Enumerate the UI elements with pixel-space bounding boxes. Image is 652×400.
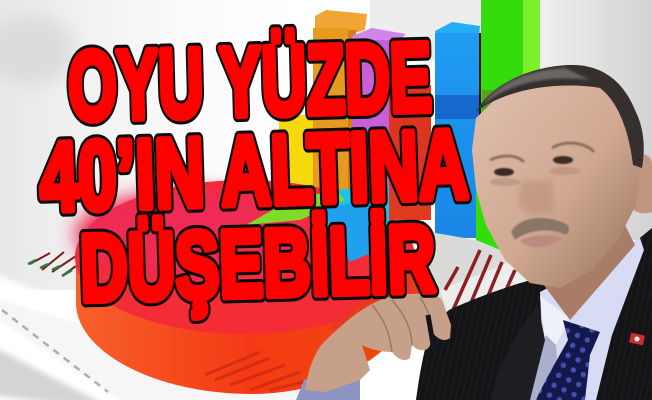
headline [38,23,470,322]
bar: orange [313,10,367,203]
shirt collar [530,238,644,400]
pie side [76,250,420,394]
pie side shading [205,352,320,390]
bar: blue [435,22,482,238]
sleeve [296,372,360,400]
floor wedge with red stripes [400,232,540,320]
face [472,75,642,288]
bar chart columns [279,0,540,250]
bar: red [389,85,431,215]
hand [305,294,451,392]
necktie [536,320,600,400]
flag pin [629,333,645,345]
neck [540,225,635,320]
bar: green [476,0,540,250]
moustache [511,218,569,240]
nose shadow [518,180,555,215]
headline line 2: 40’IN ALTINA [38,110,470,233]
suit [416,228,652,400]
headline line 3: DÜŞEBİLİR [79,205,437,322]
headline line 1: OYU YÜZDE [67,23,433,142]
bar: purple [352,28,406,210]
headline line 1: OYU YÜZDE [67,23,433,142]
ear [632,154,652,213]
bar: yellow [279,115,315,210]
pen [428,315,434,350]
man in suit [296,65,652,400]
headline line 3: DÜŞEBİLİR [79,205,437,322]
headline line 2: 40’IN ALTINA [38,110,470,233]
lips [520,235,562,247]
hair [476,65,644,168]
printed chart sheet [0,252,330,400]
pie chart [75,180,432,394]
eyes and brows [490,143,594,186]
pie slices [322,185,390,240]
pie top [75,180,415,334]
lapel [490,305,545,400]
